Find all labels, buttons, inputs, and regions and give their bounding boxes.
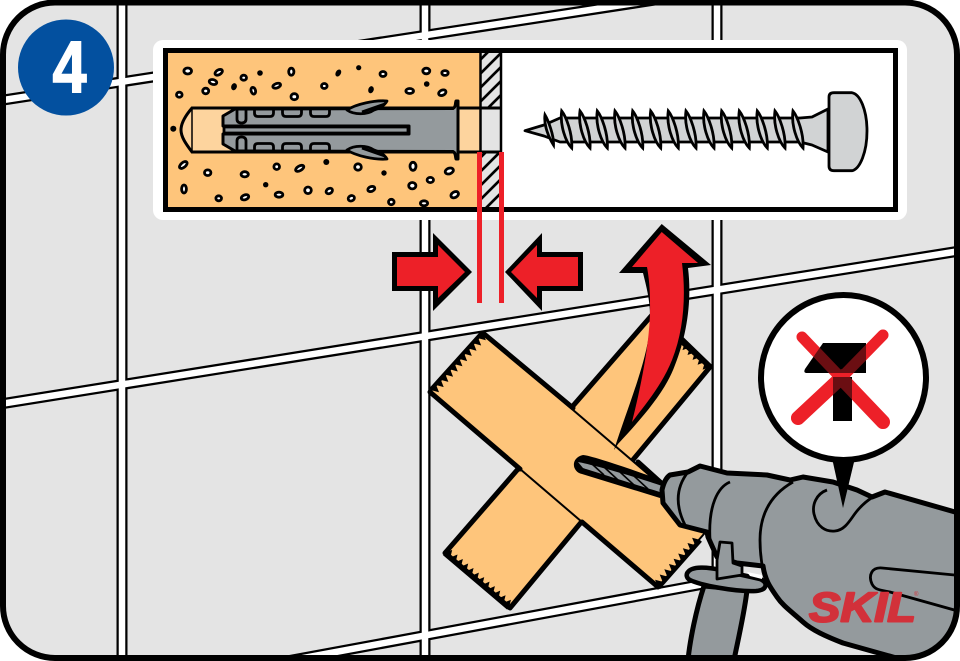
screw [525, 93, 867, 171]
callout circle [761, 295, 926, 460]
drilled hole [181, 108, 501, 152]
drill [574, 455, 960, 661]
red gap marker lines [480, 152, 502, 303]
arrow: curved red arrow up to panel [614, 224, 711, 450]
arrow: red arrow pointing right [392, 233, 472, 311]
logo: SKIL: ® [914, 591, 919, 598]
drill body [662, 466, 960, 661]
panel white backing [153, 40, 907, 220]
logo: SKIL: SKIL [809, 584, 916, 630]
arrow: red arrow pointing left [505, 233, 583, 311]
dowel center slit [224, 127, 408, 133]
concrete wall section [165, 50, 481, 210]
white gap behind collar [747, 572, 762, 579]
panel: wall section with dowel and screw [153, 40, 907, 220]
side handle collar [687, 568, 766, 591]
dowel body [223, 101, 458, 159]
masking tape cross [429, 315, 712, 610]
dowel barbs [347, 101, 387, 159]
step number badge [18, 20, 114, 116]
icon: hammer [804, 343, 866, 421]
red cross base [798, 335, 883, 422]
callout pointer [832, 458, 855, 508]
panel black border [166, 50, 896, 210]
logo: SKIL [808, 591, 918, 623]
tape strip: upper-left to lower-right [429, 331, 710, 589]
drill contour lines [678, 472, 960, 613]
callout: no hammer mode [761, 295, 926, 508]
tape strip: lower-left to upper-right [443, 315, 712, 610]
step number badge: 4 [52, 28, 87, 109]
chuck stem [717, 542, 742, 579]
hatched tile section [481, 50, 501, 210]
drill bit [574, 455, 666, 498]
red cross overlay [798, 335, 883, 422]
dowel ribs [237, 109, 330, 151]
wall plug dowel [223, 101, 458, 159]
drill side handle [688, 586, 747, 660]
